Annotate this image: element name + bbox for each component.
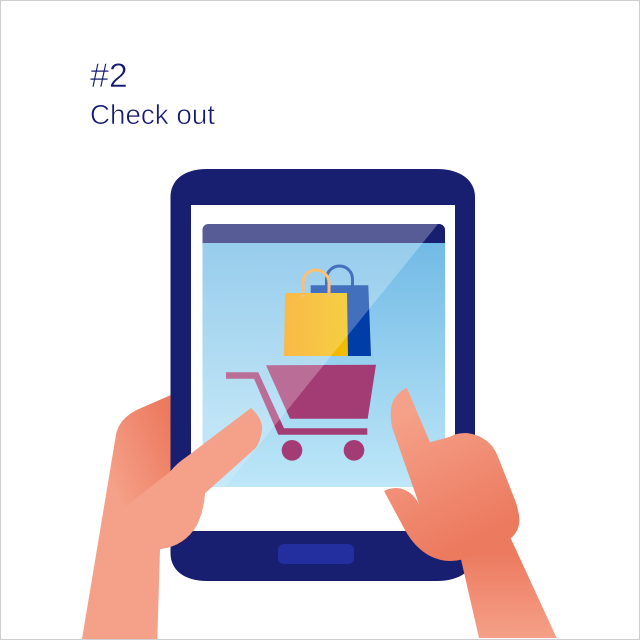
palm and pointing finger	[384, 388, 519, 561]
browser header bar	[202, 224, 445, 243]
white bezel screen	[191, 205, 455, 531]
tablet	[170, 169, 475, 581]
right hand	[384, 388, 557, 638]
tablet body	[170, 169, 475, 581]
icon: shopping bags	[284, 266, 371, 356]
wrist	[460, 538, 557, 638]
display	[200, 224, 445, 487]
icon: shopping cart	[226, 365, 376, 461]
title	[90, 57, 215, 130]
title: Check out	[90, 99, 215, 130]
glass reflection	[200, 224, 438, 487]
left hand: pointing finger	[101, 408, 262, 560]
home button	[278, 544, 354, 564]
left hand: back of palm and arm	[82, 395, 200, 639]
display background	[202, 224, 445, 487]
title: #2	[90, 57, 128, 95]
